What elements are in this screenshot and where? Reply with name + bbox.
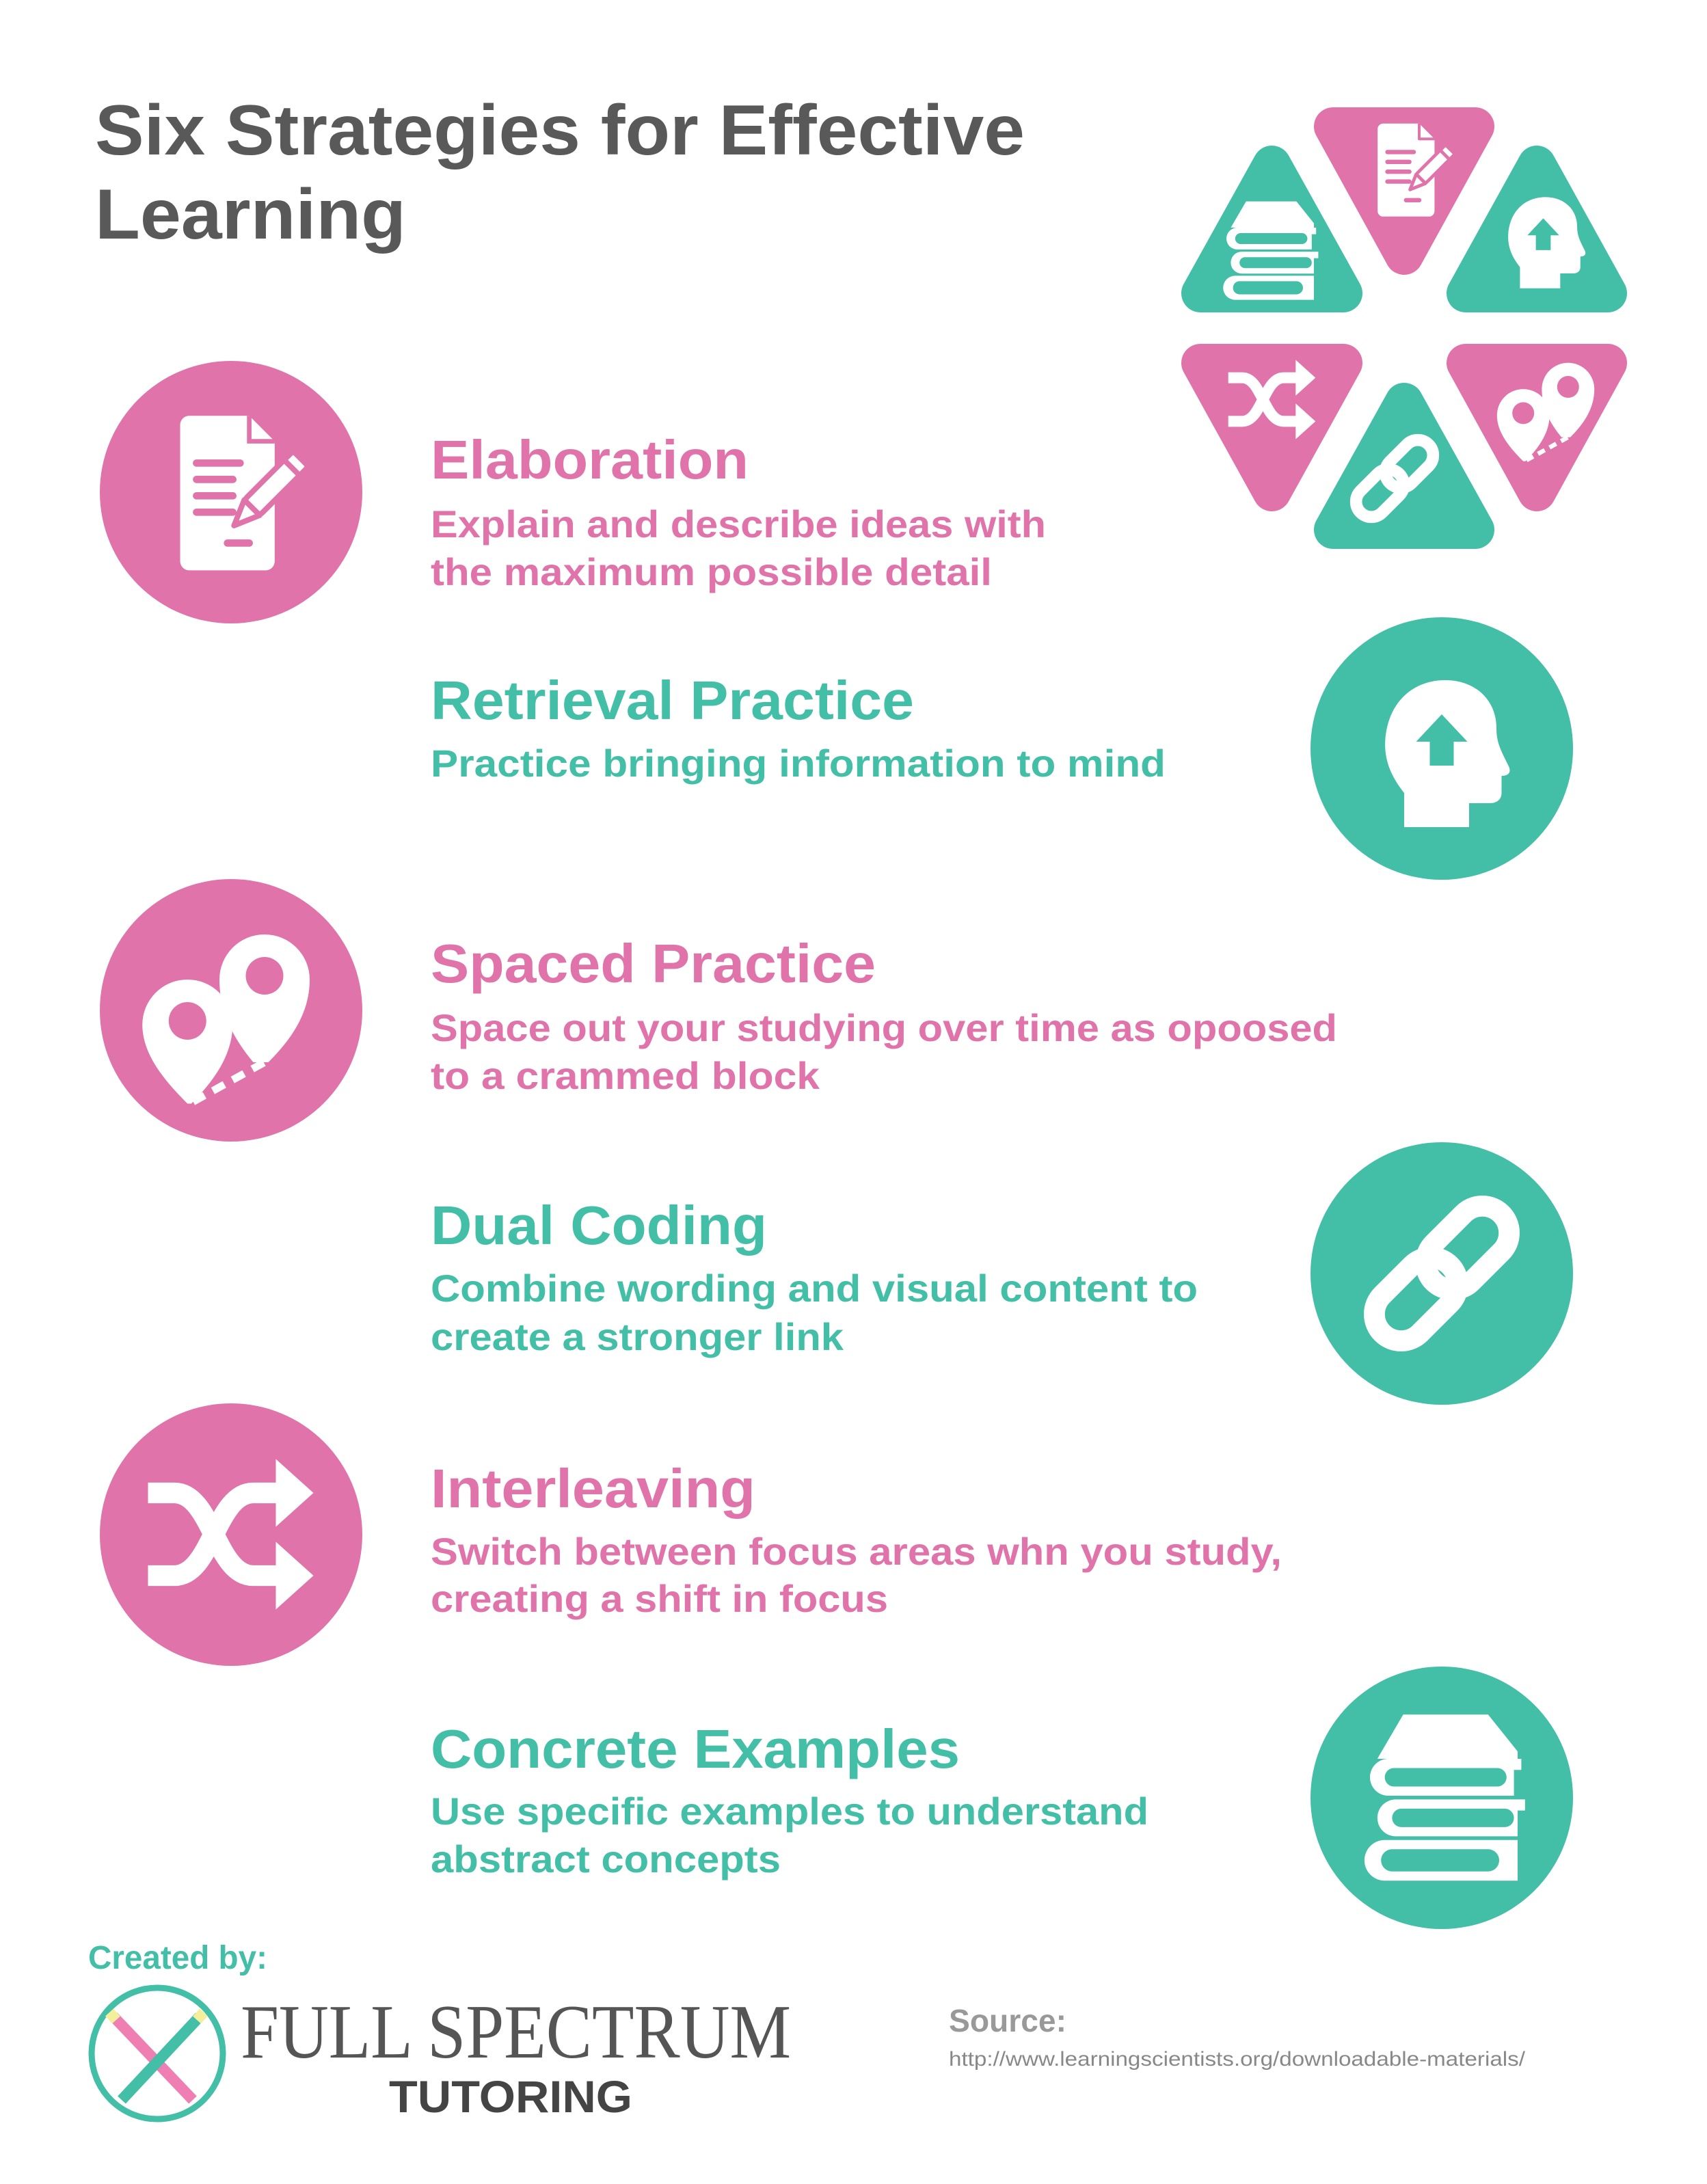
- source: http://www.learningscientists.org/downloadable-materials/: [949, 2048, 1526, 2071]
- strategy: retrieval practice: Retrieval Practice: [431, 670, 914, 731]
- strategy: elaboration: Explain and describe ideas with: [431, 502, 1046, 545]
- strategy: concrete examples: [431, 1718, 1148, 1880]
- strategy: elaboration: the maximum possible detail: [431, 550, 992, 593]
- icon: spaced circle: [100, 879, 362, 1142]
- strategy: dual coding: [431, 1195, 1198, 1358]
- hexagon of triangle icons: [1200, 124, 1608, 530]
- logo: full spectrum tutoring: FULL SPECTRUM: [241, 1990, 791, 2075]
- strategy: dual coding: Dual Coding: [431, 1195, 767, 1256]
- strategy: interleaving: [431, 1458, 1282, 1620]
- strategy: dual coding: Combine wording and visual content to: [431, 1267, 1198, 1310]
- triangle: spaced: [1466, 363, 1608, 492]
- title: Learning: [95, 175, 406, 254]
- triangle: concrete examples: [1200, 165, 1343, 300]
- strategy: dual coding: create a stronger link: [431, 1315, 844, 1358]
- icon: retrieval circle: [1311, 617, 1573, 880]
- icon: elaboration circle: [100, 361, 362, 623]
- strategy: spaced practice: [431, 933, 1337, 1097]
- strategy: retrieval practice: Practice bringing information to mind: [431, 742, 1166, 785]
- source: Source:: [949, 2003, 1066, 2038]
- strategy: spaced practice: Spaced Practice: [431, 933, 876, 994]
- triangle: elaboration: [1333, 124, 1475, 256]
- strategy: spaced practice: Space out your studying over time as opoosed: [431, 1006, 1337, 1049]
- title: Six Strategies for Effective: [95, 91, 1025, 170]
- icon: concrete examples circle: [1311, 1667, 1573, 1929]
- icon: interleaving circle: [100, 1403, 362, 1666]
- logo: full spectrum tutoring: TUTORING: [389, 2071, 632, 2122]
- strategy: interleaving: Interleaving: [431, 1458, 755, 1519]
- triangle: interleaving: [1200, 360, 1343, 492]
- strategy: elaboration: [431, 429, 1046, 593]
- strategy: spaced practice: to a crammed block: [431, 1054, 820, 1097]
- source: [949, 2003, 1526, 2071]
- strategy: elaboration: Elaboration: [431, 429, 749, 490]
- logo: full spectrum tutoring: [92, 1988, 791, 2122]
- icon: dual coding circle: [1311, 1142, 1573, 1405]
- created by label: Created by:: [88, 1940, 267, 1976]
- title: [95, 91, 1025, 254]
- strategy: concrete examples: Use specific examples to understand: [431, 1790, 1148, 1833]
- strategy: concrete examples: Concrete Examples: [431, 1718, 960, 1779]
- strategy: concrete examples: abstract concepts: [431, 1837, 781, 1880]
- triangle: dual coding: [1333, 402, 1475, 530]
- strategy: interleaving: creating a shift in focus: [431, 1577, 888, 1620]
- strategy: retrieval practice: [431, 670, 1166, 785]
- strategy: interleaving: Switch between focus areas whn you study,: [431, 1530, 1282, 1573]
- triangle: retrieval: [1466, 165, 1608, 293]
